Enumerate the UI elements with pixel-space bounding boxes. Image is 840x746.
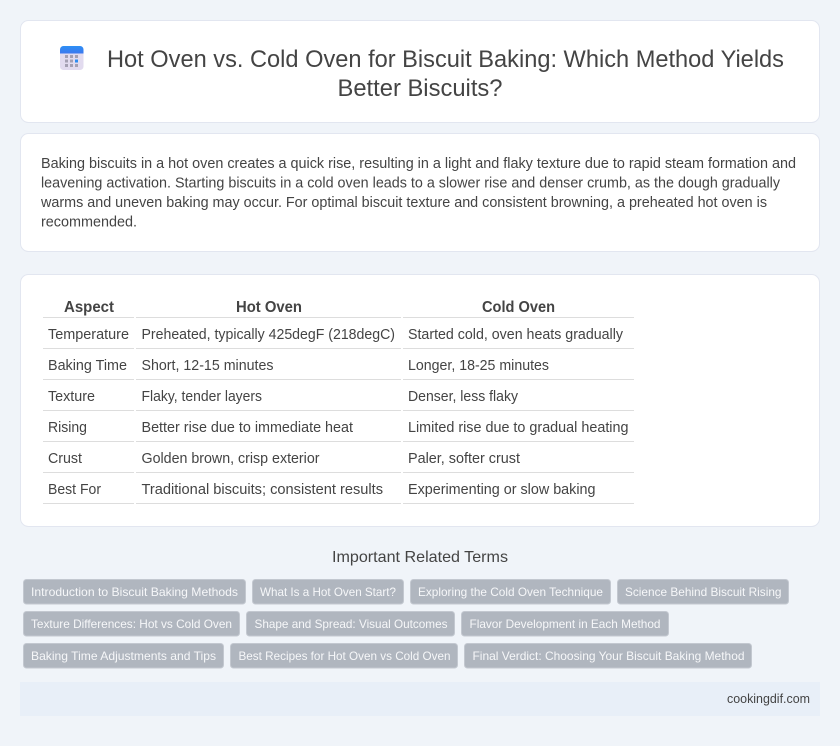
table row: temperature: Preheated, typically 425degF (218degC) <box>142 327 395 343</box>
tag: Introduction to Biscuit Baking Methods <box>31 585 238 599</box>
tag <box>24 612 240 636</box>
table row: crust: Paler, softer crust <box>408 451 520 467</box>
icon: calendar <box>60 46 84 70</box>
tag: Flavor Development in Each Method <box>470 617 660 631</box>
table header: Hot Oven <box>236 299 302 316</box>
table row: rising: Better rise due to immediate heat <box>142 420 353 436</box>
panel: comparison table <box>20 274 820 526</box>
title <box>107 46 784 102</box>
panel: header <box>20 20 820 122</box>
table row: crust <box>48 451 520 467</box>
table header: Aspect <box>64 299 115 316</box>
table row: best for <box>48 482 596 498</box>
table row: rising: Limited rise due to gradual heating <box>408 420 628 436</box>
tag: Science Behind Biscuit Rising <box>625 585 782 599</box>
tag <box>462 612 668 636</box>
table row: rising: Rising <box>48 420 87 436</box>
tag: Exploring the Cold Oven Technique <box>418 585 603 599</box>
tag <box>252 580 404 604</box>
table row: temperature <box>48 327 624 343</box>
tag <box>464 644 752 668</box>
tags: related terms <box>24 580 788 668</box>
text block: summary paragraph <box>40 156 796 230</box>
table header: Cold Oven <box>482 299 555 316</box>
tag: What Is a Hot Oven Start? <box>260 585 396 599</box>
tag: Baking Time Adjustments and Tips <box>31 649 216 663</box>
table row: best for: Traditional biscuits; consistent results <box>142 482 383 498</box>
table row: texture: Texture <box>48 389 95 405</box>
table row: temperature: Temperature <box>48 327 129 343</box>
table row: best for: Best For <box>48 482 101 498</box>
title: Hot Oven vs. Cold Oven for Biscuit Baking: Which Method Yields <box>107 46 784 73</box>
heading: important related terms: Important Related Terms <box>332 549 508 566</box>
table row: baking time <box>48 358 549 374</box>
table row: baking time: Longer, 18-25 minutes <box>408 358 549 374</box>
tag: Shape and Spread: Visual Outcomes <box>254 617 448 631</box>
tag <box>230 644 458 668</box>
title: Better Biscuits? <box>338 75 502 102</box>
table row: texture <box>48 389 519 405</box>
table row: temperature: Started cold, oven heats gradually <box>408 327 624 343</box>
tag: Final Verdict: Choosing Your Biscuit Baking Method <box>472 649 744 663</box>
table row: best for: Experimenting or slow baking <box>408 482 596 498</box>
table row: baking time: Short, 12-15 minutes <box>142 358 274 374</box>
table row: texture: Flaky, tender layers <box>142 389 262 405</box>
tag: Best Recipes for Hot Oven vs Cold Oven <box>238 649 450 663</box>
text block: summary paragraph: leavening activation. Starting biscuits in a cold oven leads to a slower rise and denser crumb, as the dough gradually <box>41 176 781 192</box>
text block: summary paragraph: recommended. <box>41 214 137 230</box>
panel: introduction text <box>20 134 820 252</box>
table row: rising <box>48 420 628 436</box>
table row: crust: Crust <box>48 451 82 467</box>
tag <box>618 580 788 604</box>
text block: summary paragraph: Baking biscuits in a hot oven creates a quick rise, resulting in a light and flaky texture due to rapid steam formation and <box>41 156 796 172</box>
tag <box>24 580 246 604</box>
tag <box>410 580 610 604</box>
tag <box>246 612 454 636</box>
tag <box>24 644 224 668</box>
table header <box>64 299 555 316</box>
footer: cookingdif.com <box>727 692 810 706</box>
table row: texture: Denser, less flaky <box>408 389 519 405</box>
table row: baking time: Baking Time <box>48 358 127 374</box>
table row: crust: Golden brown, crisp exterior <box>142 451 320 467</box>
footer <box>20 682 820 716</box>
text block: summary paragraph: warms and uneven baking may occur. For optimal biscuit texture and consistent browning, a preheated hot oven is <box>40 195 767 211</box>
tag: Texture Differences: Hot vs Cold Oven <box>31 617 232 631</box>
